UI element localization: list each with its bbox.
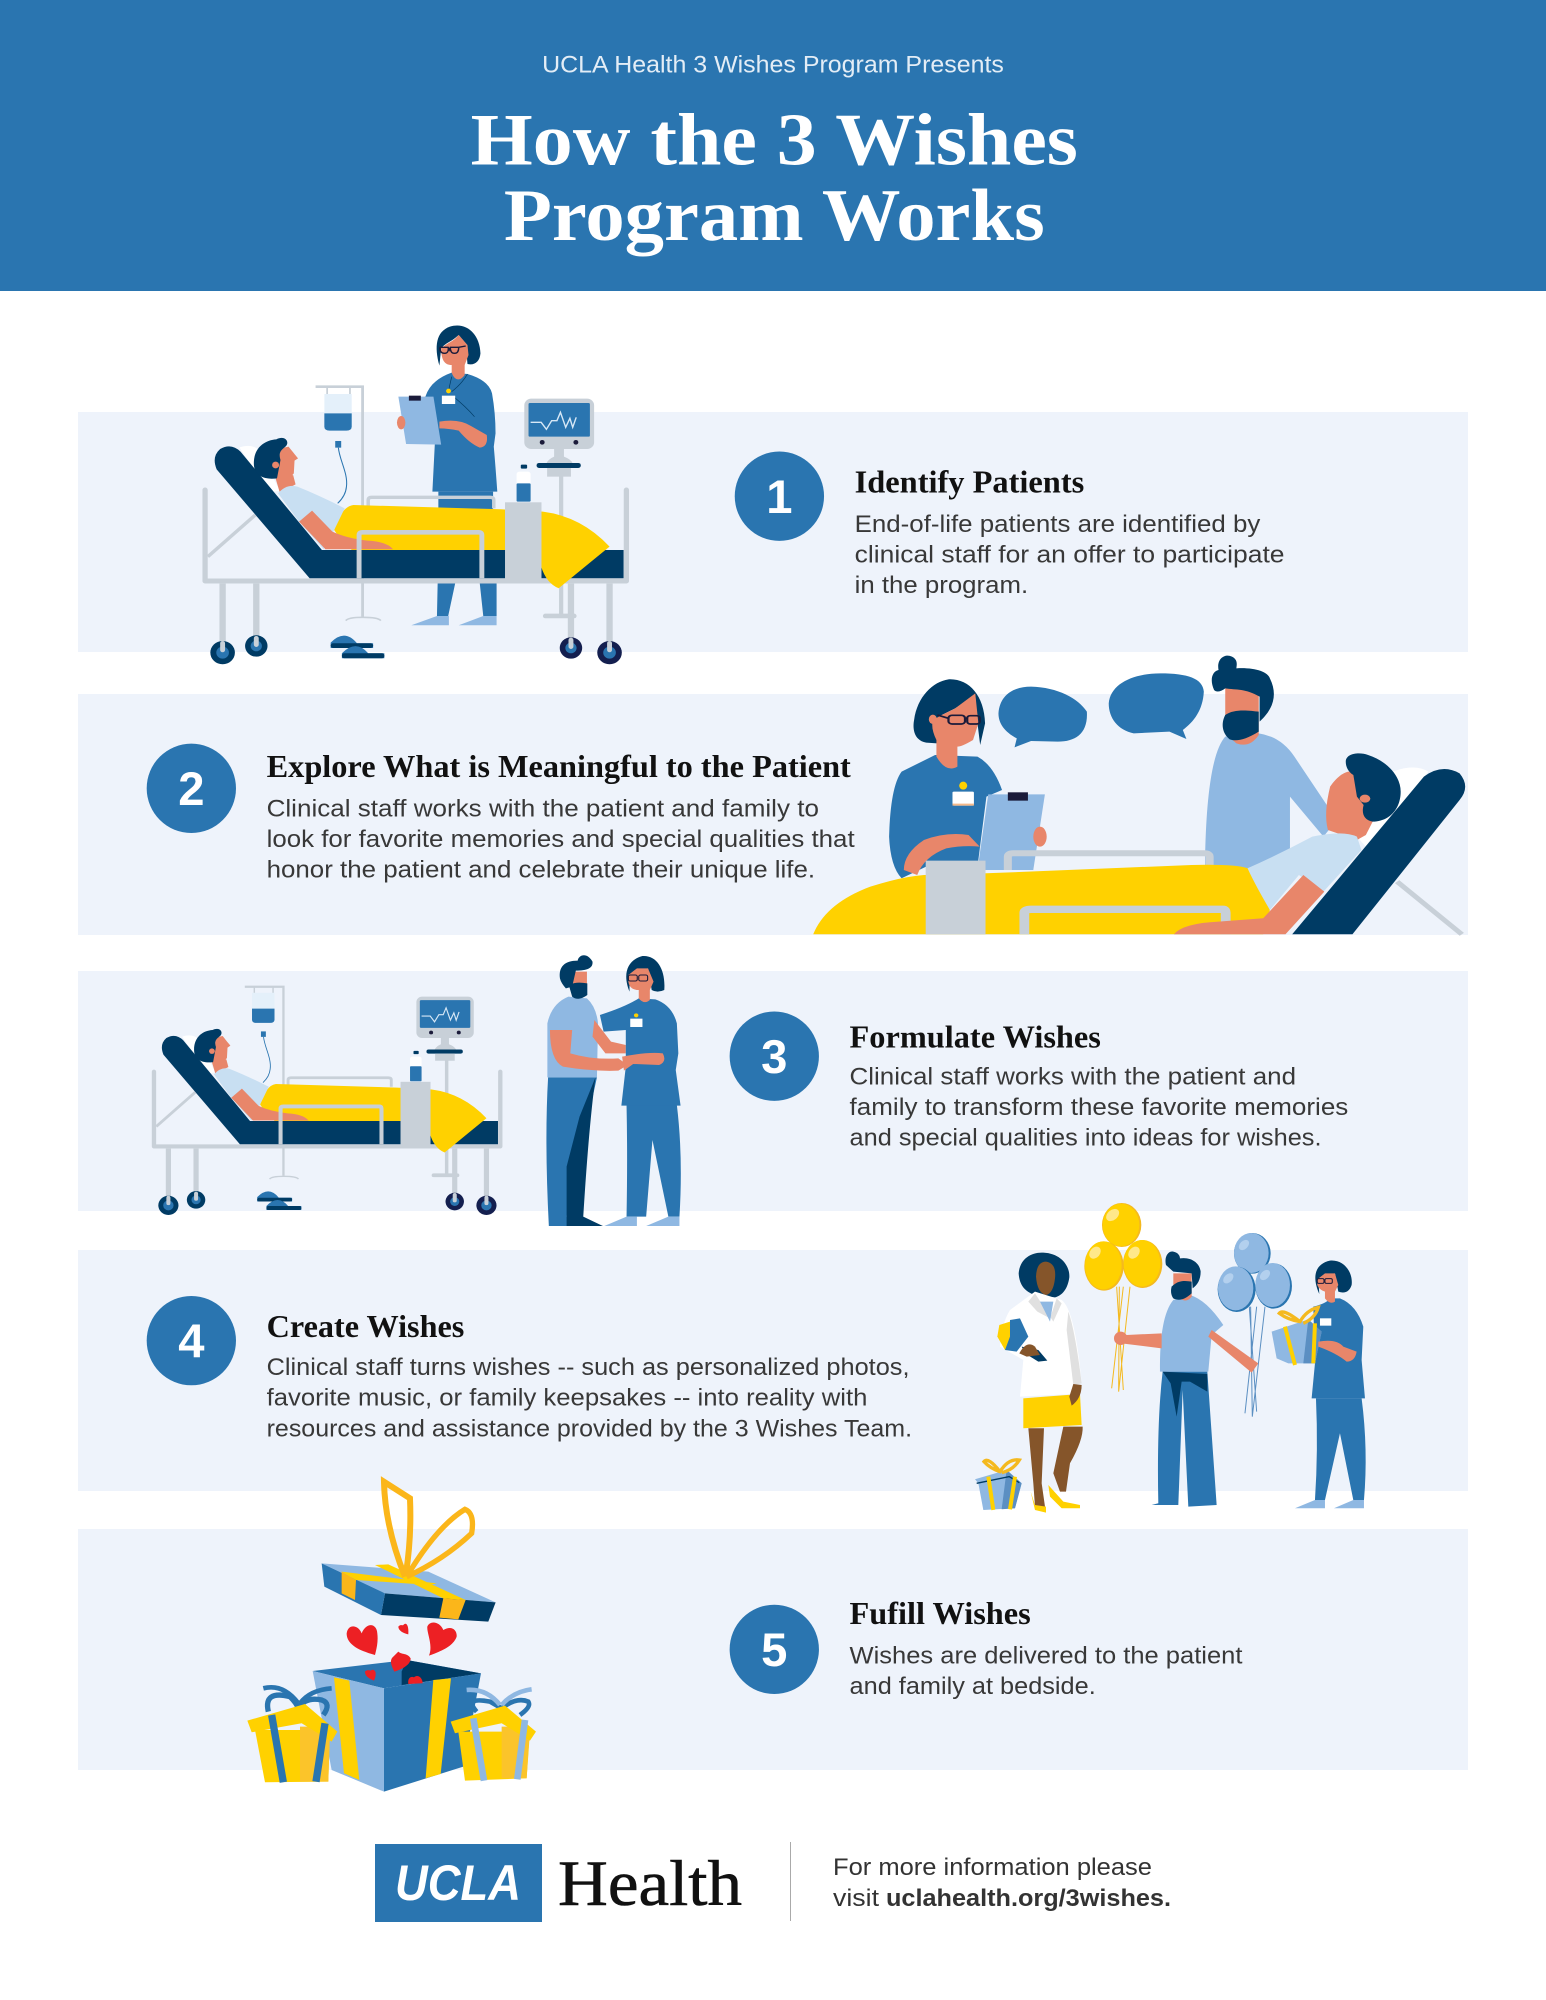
- title: How the 3 Wishes: [471, 100, 1078, 182]
- text: step 5 description: [850, 1643, 1243, 1700]
- illustration: hospital bed with patient: [205, 387, 626, 664]
- panel: step 4 create wishes: [78, 1203, 1468, 1513]
- subtitle: UCLA Health 3 Wishes Program Presents: [542, 52, 1004, 78]
- heading: create wishes: Create Wishes: [267, 1309, 464, 1344]
- bed wheels: [210, 635, 622, 664]
- family member: [1205, 656, 1337, 870]
- open box: [313, 1660, 481, 1792]
- more information text: [833, 1854, 1171, 1912]
- IV stand: [316, 387, 381, 621]
- panel: step 3 formulate wishes: [78, 955, 1468, 1226]
- number badge 5: [730, 1605, 819, 1694]
- text: step 4 description: [267, 1355, 912, 1442]
- UCLA logo box: [375, 1844, 542, 1922]
- patient: [254, 438, 393, 549]
- UCLA logo box: UCLA: [395, 1855, 521, 1911]
- nurse: [889, 679, 1047, 878]
- panel: step 2 explore what is meaningful: [78, 656, 1468, 935]
- footer: [375, 1842, 1171, 1922]
- far bed rail: [1008, 853, 1210, 870]
- number badge 1: [735, 452, 824, 541]
- illustration: open gift boxes with hearts: [247, 1482, 536, 1792]
- lid with ribbon: [322, 1482, 496, 1622]
- text: step 5 description: and family at bedside.: [850, 1674, 1096, 1700]
- illustration: nurse with clipboard: [397, 326, 497, 625]
- text: step 3 description: [850, 1064, 1348, 1151]
- text: step 3 description: family to transform these favorite memories: [850, 1095, 1348, 1121]
- header banner: [0, 0, 1546, 291]
- text: step 2 description: look for favorite memories and special qualities that: [267, 827, 855, 853]
- heading: identify patients: Identify Patients: [855, 464, 1084, 499]
- pillow: [1357, 767, 1428, 847]
- number badge 2: 2: [178, 763, 204, 816]
- text: step 4 description: favorite music, or family keepsakes -- into reality with: [267, 1386, 867, 1412]
- left gift: [247, 1687, 337, 1782]
- text: step 2 description: [267, 796, 855, 884]
- bedside table: [926, 861, 986, 934]
- patient: [1174, 753, 1401, 934]
- heading: formulate wishes: Formulate Wishes: [850, 1019, 1101, 1054]
- bed back rest: [1292, 769, 1465, 934]
- illustration: hospital bed with patient: [154, 987, 500, 1215]
- bedside table with bottle: [505, 465, 541, 580]
- text: step 1 description: [855, 512, 1285, 599]
- near bed rail: [1024, 909, 1226, 934]
- text: step 5 description: Wishes are delivered to the patient: [850, 1643, 1243, 1669]
- text: step 2 description: Clinical staff works with the patient and family to: [267, 796, 819, 822]
- blanket: [813, 865, 1270, 934]
- right gift: [451, 1689, 536, 1781]
- number badge 5: 5: [761, 1624, 787, 1677]
- heading: explore: Explore What is Meaningful to the Patient: [267, 749, 851, 784]
- heading: fufill wishes: Fufill Wishes: [850, 1596, 1031, 1631]
- hearts: [347, 1623, 457, 1684]
- text: step 3 description: and special qualities into ideas for wishes.: [850, 1125, 1322, 1151]
- bed frame: [205, 490, 626, 648]
- bed rail: [359, 532, 482, 578]
- text: step 2 description: honor the patient and celebrate their unique life.: [267, 858, 815, 884]
- text: step 3 description: Clinical staff works with the patient and: [850, 1064, 1296, 1090]
- number badge 3: 3: [761, 1031, 787, 1084]
- mattress: [215, 446, 624, 578]
- speech bubble left: [998, 687, 1087, 747]
- illustration: people with balloons and gifts: [975, 1203, 1366, 1513]
- blanket: [334, 505, 610, 588]
- number badge 2: [147, 744, 236, 833]
- family member: [546, 955, 628, 1226]
- woman in white coat with bouquet: [997, 1253, 1083, 1513]
- blue balloons: [1218, 1233, 1292, 1417]
- number badge 3: [730, 1012, 819, 1101]
- text: step 4 description: Clinical staff turns wishes -- such as personalized photos,: [267, 1355, 910, 1381]
- yellow balloons: [1084, 1203, 1162, 1392]
- bed support: [1397, 882, 1462, 934]
- nurse with gift: [1272, 1261, 1366, 1508]
- illustration: family member and nurse holding hands: [546, 955, 681, 1226]
- text: step 4 description: resources and assistance provided by the 3 Wishes Team.: [267, 1416, 912, 1442]
- panel: step 5 fulfill wishes: [78, 1482, 1468, 1792]
- number badge 4: [147, 1296, 236, 1385]
- slippers: [331, 636, 384, 658]
- text: step 1 description: End-of-life patients are identified by: [855, 512, 1260, 538]
- title: [471, 100, 1078, 257]
- small gift: [975, 1460, 1022, 1510]
- more information text: For more information please: [833, 1854, 1152, 1881]
- text: step 1 description: in the program.: [855, 573, 1028, 599]
- nurse: [600, 956, 681, 1226]
- Health wordmark: Health: [558, 1848, 742, 1920]
- number badge 1: 1: [766, 471, 793, 524]
- title: Program Works: [504, 175, 1045, 257]
- illustration: nurse, family member and patient conversation: [813, 656, 1465, 934]
- text: step 1 description: clinical staff for an offer to participate: [855, 543, 1285, 569]
- man with balloons: [1114, 1252, 1258, 1507]
- more information text: uclahealth.org/3wishes.: [886, 1885, 1171, 1912]
- speech bubble right: [1109, 673, 1204, 739]
- more information text: visit: [833, 1885, 879, 1912]
- number badge 4: 4: [178, 1315, 204, 1368]
- panel: step 1 identify patients: [78, 326, 1468, 664]
- pillow: [239, 446, 280, 493]
- patient monitor: [524, 399, 594, 618]
